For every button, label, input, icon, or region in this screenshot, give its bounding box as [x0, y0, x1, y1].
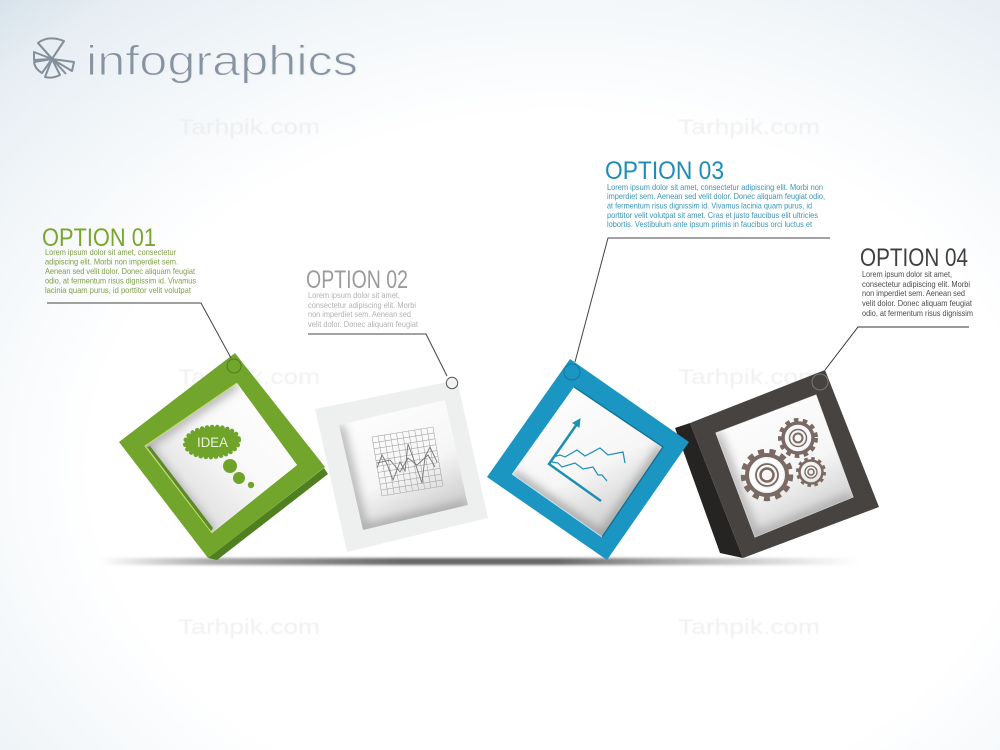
body: option 01: Aenean sed velit dolor. Donec aliquam feugiat — [45, 266, 196, 276]
large gear — [744, 452, 790, 498]
body: option 03: at fermentum risus dignissim id. Vivamus lacinia quam purus, id — [607, 200, 812, 210]
body: option 04: odio, at fermentum risus dignissim — [862, 308, 973, 318]
heading: option 01: OPTION 01 — [42, 224, 156, 252]
body: option 01 — [45, 247, 196, 295]
heading: option 02: OPTION 02 — [306, 266, 408, 294]
icon: idea thought bubble — [184, 425, 254, 488]
blue frame — [487, 359, 689, 560]
body: option 03: Lorem ipsum dolor sit amet, consectetur adipiscing elit. Morbi non — [607, 182, 823, 192]
watermarks — [178, 116, 820, 639]
body: option 03: porttitor velit volutpat sit amet. Cras et justo faucibus elit ultricies — [607, 210, 818, 220]
body: option 02: velit dolor. Donec aliquam feugiat — [308, 319, 419, 329]
leader line: option 02 — [308, 334, 458, 389]
black frame — [675, 370, 879, 558]
icon: growth chart — [549, 419, 625, 501]
body: option 02 — [308, 290, 419, 329]
medium gear — [780, 420, 816, 456]
body: option 04: non imperdiet sem. Aenean sed — [862, 288, 965, 298]
body: option 03 — [607, 182, 825, 229]
white frame — [315, 380, 488, 552]
body: option 04: consectetur adipiscing elit. Morbi — [862, 279, 970, 289]
body: option 04: velit dolor. Donec aliquam feugiat — [862, 298, 973, 308]
icon: idea thought bubble: IDEA — [197, 435, 228, 450]
body: option 01: lacinia quam purus, id porttitor velit volutpat — [45, 285, 192, 295]
panel: option 02 text — [306, 266, 419, 329]
leader line: option 04 — [812, 327, 969, 390]
heading: option 04: OPTION 04 — [860, 244, 968, 272]
logo icon — [34, 38, 74, 78]
watermarks: Tarhpik.com — [678, 366, 820, 389]
icon: line chart on grid — [372, 427, 443, 496]
panel: option 03 text — [605, 157, 825, 229]
body: option 02: consectetur adipiscing elit. Morbi — [308, 300, 416, 310]
leader line: option 03 — [564, 238, 830, 380]
panel: option 04 text — [860, 244, 973, 318]
green frame — [119, 353, 328, 560]
watermarks: Tarhpik.com — [178, 616, 320, 639]
body: option 03: lobortis. Vestibulum ante ipsum primis in faucibus orci luctus et — [607, 219, 813, 229]
watermarks: Tarhpik.com — [678, 116, 820, 139]
body: option 04 — [862, 269, 973, 318]
body: option 01: odio, at fermentum risus dignissim id. Vivamus — [45, 276, 196, 286]
small gear — [798, 458, 824, 486]
leader line: option 01 — [47, 303, 241, 373]
title: infographics — [86, 37, 358, 84]
body: option 04: Lorem ipsum dolor sit amet, — [862, 269, 952, 279]
floor shadow — [100, 558, 860, 565]
watermarks: Tarhpik.com — [678, 616, 820, 639]
icon: gears — [744, 420, 824, 498]
panel: option 01 text — [42, 224, 196, 295]
body: option 01: adipiscing elit. Morbi non imperdiet sem. — [45, 256, 178, 266]
watermarks: Tarhpik.com — [178, 366, 320, 389]
watermarks: Tarhpik.com — [178, 116, 320, 139]
body: option 03: imperdiet sem. Aenean sed velit dolor. Donec aliquam feugiat odio, — [607, 191, 825, 201]
body: option 02: non imperdiet sem. Aenean sed — [308, 309, 411, 319]
body: option 02: Lorem ipsum dolor sit amet, — [308, 290, 400, 300]
heading: option 03: OPTION 03 — [605, 157, 724, 185]
body: option 01: Lorem ipsum dolor sit amet, consectetur — [45, 247, 176, 257]
